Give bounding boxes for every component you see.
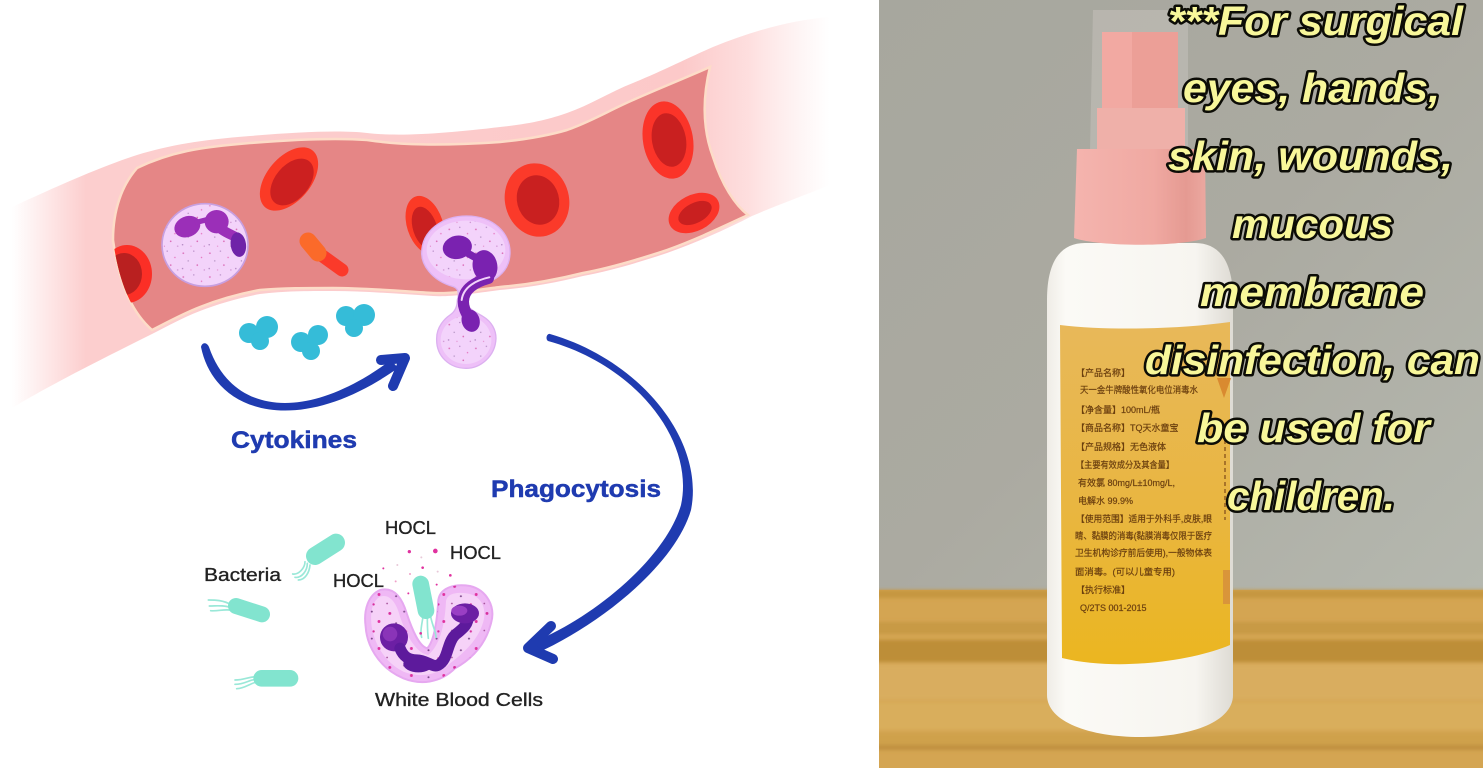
red blood cells xyxy=(102,97,726,303)
label text xyxy=(1075,367,1212,613)
wall background xyxy=(879,0,1483,591)
label text: 【产品规格】无色液体 xyxy=(1076,441,1166,452)
yellow label xyxy=(1060,322,1230,664)
label text: 电解水 99.9% xyxy=(1078,495,1133,506)
label text: 卫生机构诊疗前后使用),一般物体表 xyxy=(1075,547,1212,558)
label text: 面消毒。(可以儿童专用) xyxy=(1075,566,1175,577)
emigrating white blood cell xyxy=(422,216,510,368)
panel: blood vessel diagram xyxy=(12,17,830,710)
label text: 【主要有效成分及其含量】 xyxy=(1076,459,1174,470)
sickled red blood cell xyxy=(308,241,342,270)
caption: product usage: membrane xyxy=(1200,269,1424,315)
label text: 【使用范围】适用于外科手,皮肤,眼 xyxy=(1076,513,1212,524)
caption: product usage: be used for xyxy=(1197,405,1432,451)
label: Cytokines: Cytokines xyxy=(231,427,357,454)
caption: product usage: disinfection, can xyxy=(1145,337,1480,383)
cytokines xyxy=(239,304,375,360)
bottle body xyxy=(1047,243,1233,737)
pump nozzle xyxy=(1097,32,1185,150)
blood vessel xyxy=(12,17,830,408)
label text: 【净含量】100mL/瓶 xyxy=(1076,404,1160,415)
clear cap xyxy=(1090,10,1188,150)
label: Phagocytosis: Phagocytosis xyxy=(491,476,661,503)
label: HOCL right: HOCL xyxy=(450,542,501,563)
bacteria xyxy=(208,543,336,689)
hypochlorous acid droplets xyxy=(382,549,452,635)
caption: product usage: eyes, hands, xyxy=(1183,65,1440,111)
spray bottle xyxy=(1047,10,1233,737)
white blood cell in vessel xyxy=(162,204,248,286)
arrow: cytokines xyxy=(201,343,405,411)
caption: product usage: mucous xyxy=(1232,201,1393,247)
label text: 天一金牛牌酸性氧化电位消毒水 xyxy=(1080,384,1198,395)
label: White Blood Cells: White Blood Cells xyxy=(375,689,543,710)
white blood cell engulfing bacterium xyxy=(365,549,492,682)
label text: 【产品名称】 xyxy=(1076,367,1130,378)
pink collar xyxy=(1074,149,1206,245)
panel: product photo xyxy=(860,0,1483,768)
bacterium inside cell xyxy=(421,584,436,638)
arrow: phagocytosis xyxy=(528,334,693,659)
label text: 有效氯 80mg/L±10mg/L, xyxy=(1078,477,1175,488)
label: Bacteria: Bacteria xyxy=(204,564,282,585)
label text: 睛、黏膜的消毒(黏膜消毒仅限于医疗 xyxy=(1075,530,1212,541)
caption: product usage: skin, wounds, xyxy=(1168,133,1453,179)
label edge print xyxy=(1217,378,1231,604)
label: HOCL left: HOCL xyxy=(333,570,384,591)
caption: product usage: children. xyxy=(1227,473,1395,519)
wooden table xyxy=(860,590,1483,768)
label text: Q/2TS 001-2015 xyxy=(1080,603,1147,613)
label: HOCL top: HOCL xyxy=(385,517,436,538)
label text: 【执行标准】 xyxy=(1076,584,1130,595)
caption: product usage xyxy=(1145,0,1480,519)
label text: 【商品名称】TQ天水童宝 xyxy=(1076,422,1178,433)
